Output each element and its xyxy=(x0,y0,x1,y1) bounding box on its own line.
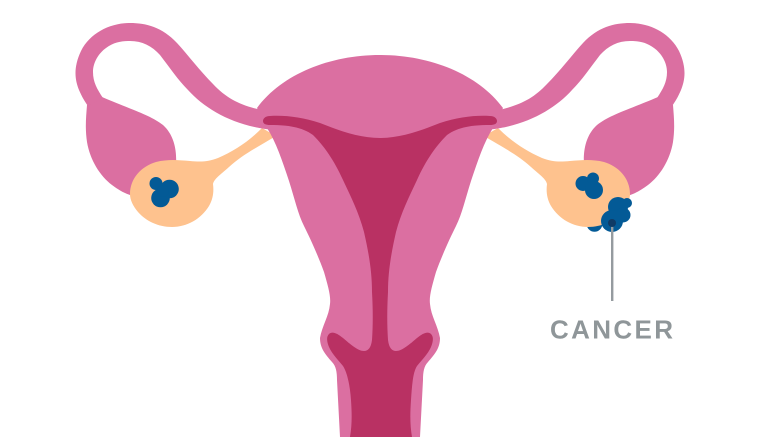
label: cancer: CANCER xyxy=(550,314,673,344)
right fimbria xyxy=(584,97,674,196)
left tumor cluster xyxy=(150,177,179,207)
uterine cavity and vagina xyxy=(263,116,497,437)
left ovary xyxy=(130,128,276,227)
callout line xyxy=(611,223,613,301)
tumor behind right ovary xyxy=(587,216,602,232)
spreading tumor cluster xyxy=(601,197,632,232)
right fallopian tube and ovary xyxy=(484,23,684,232)
right fallopian tube xyxy=(485,23,684,130)
left fimbria xyxy=(86,97,176,196)
callout anchor dot xyxy=(608,219,616,227)
uterus body xyxy=(257,55,503,437)
left fallopian tube xyxy=(76,23,275,130)
right ovary xyxy=(484,128,630,227)
left fallopian tube and ovary xyxy=(76,23,276,227)
right ovary tumor cluster xyxy=(576,172,603,199)
